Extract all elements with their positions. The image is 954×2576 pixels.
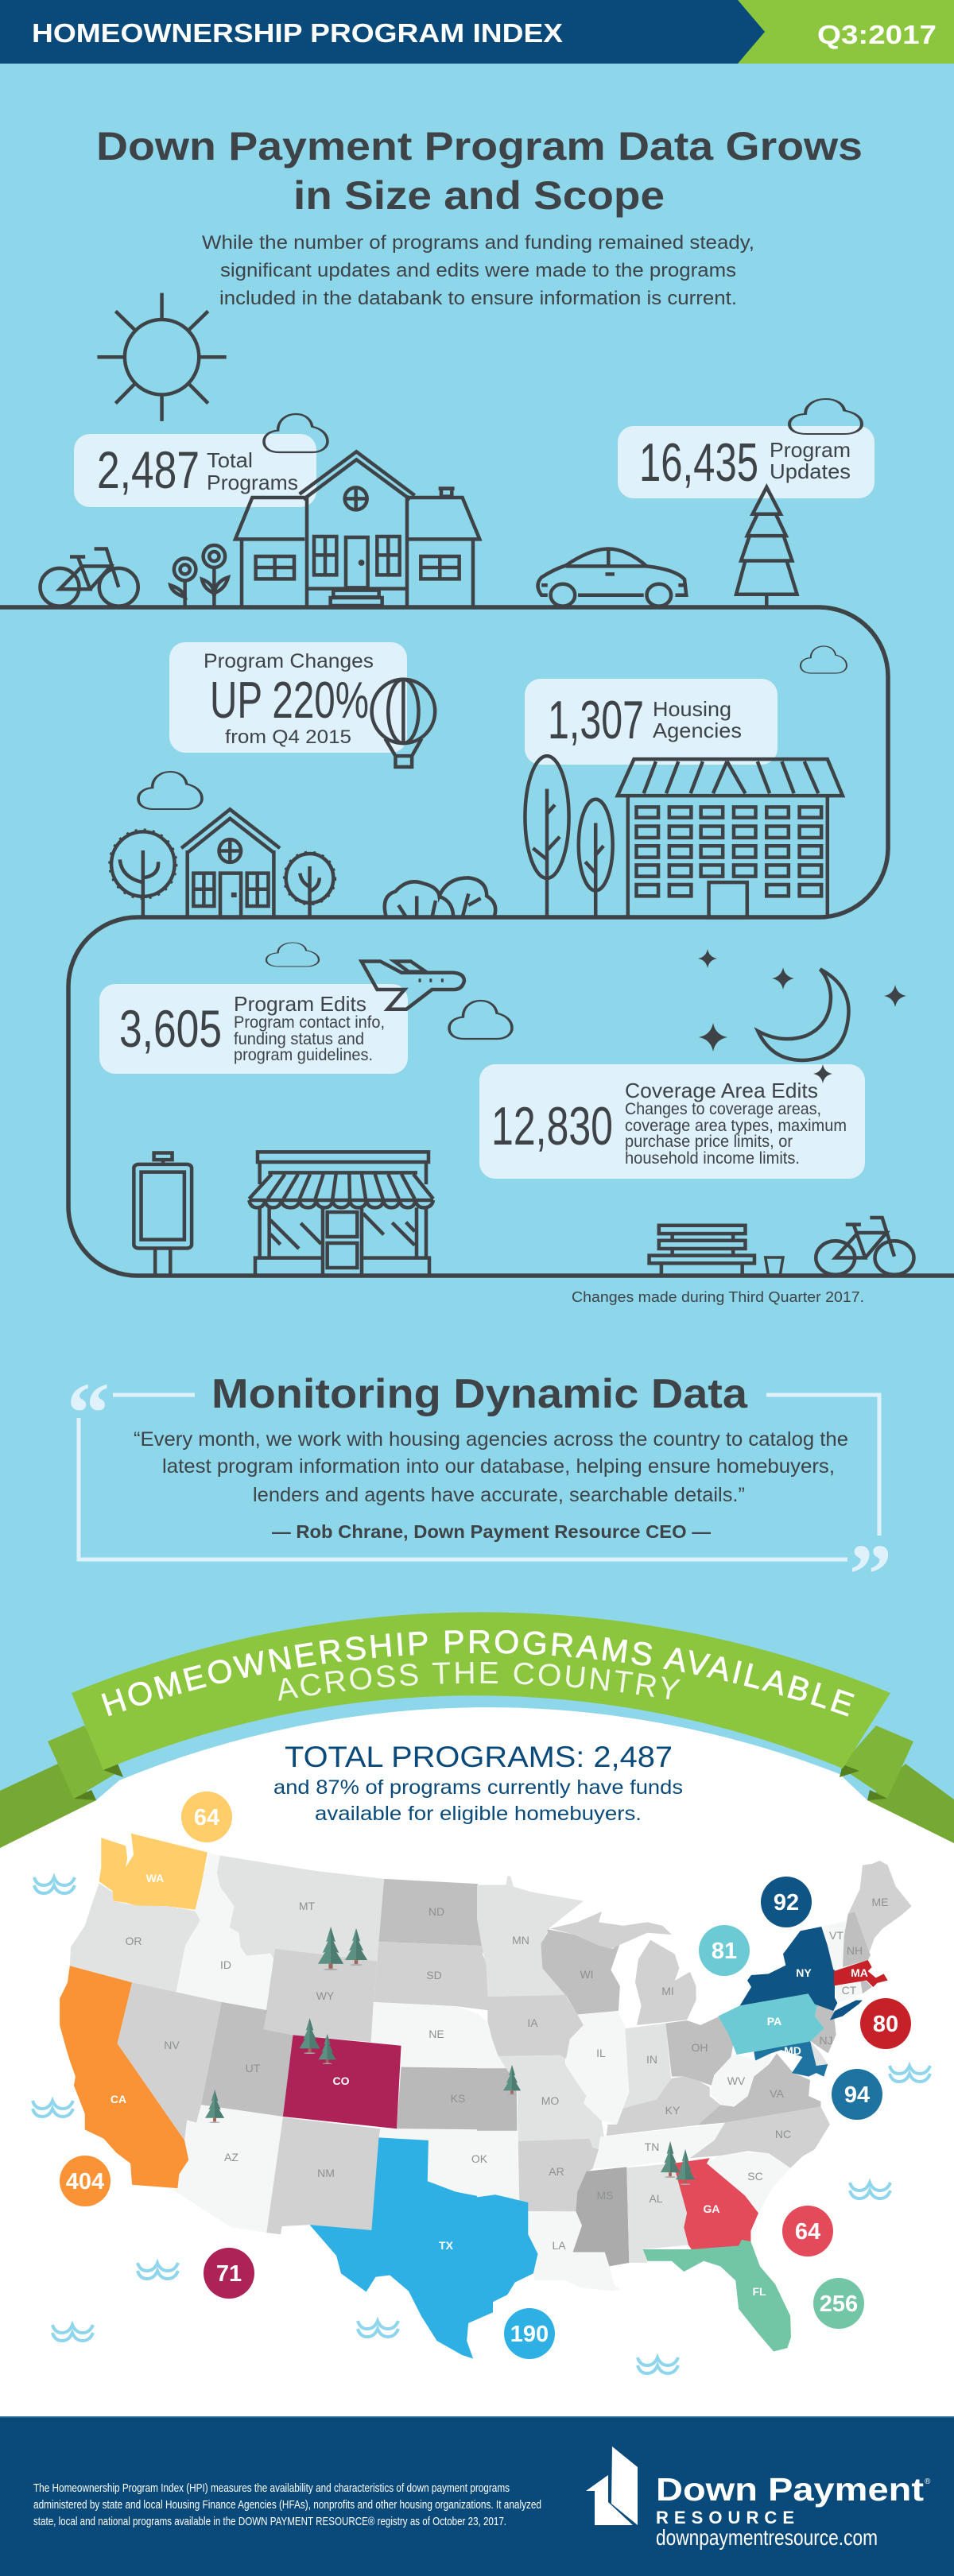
map labels: highlighted states: NY bbox=[796, 1966, 812, 1979]
map labels: grey states: AR bbox=[549, 2165, 564, 2178]
icon: bicycle bbox=[41, 549, 138, 606]
state count bubbles bbox=[60, 1792, 911, 2359]
map: northeastern states bbox=[718, 1861, 912, 2055]
icon: cloud bbox=[449, 1001, 512, 1039]
stat: housing agencies: 1,307 bbox=[548, 690, 644, 750]
map labels: grey states: OR bbox=[126, 1935, 142, 1947]
map labels: grey states: LA bbox=[552, 2239, 566, 2252]
title bbox=[96, 124, 863, 218]
map labels: grey states: OH bbox=[692, 2041, 708, 2054]
map labels: grey states: AL bbox=[649, 2192, 663, 2205]
closing quote mark: ” bbox=[849, 1528, 892, 1622]
map labels: grey states: OK bbox=[471, 2152, 488, 2165]
stat: coverage area edits: Changes to coverage areas, bbox=[625, 1100, 821, 1118]
map labels: grey states: KY bbox=[665, 2104, 681, 2117]
ribbon subheading: ACROSS THE COUNTRY bbox=[278, 1662, 681, 1701]
bubble: WA 64: 64 bbox=[194, 1805, 219, 1830]
map labels: grey states: WY bbox=[316, 1989, 335, 2002]
map labels: grey states: MO bbox=[541, 2094, 559, 2107]
icon: street sign bbox=[134, 1153, 192, 1276]
quote text bbox=[134, 1428, 848, 1506]
icon: house bbox=[235, 451, 479, 606]
stat: housing agencies: Agencies bbox=[653, 719, 742, 742]
map labels: highlighted states bbox=[111, 1872, 868, 2298]
footer disclaimer: administered by state and local Housing Finance Agencies (HFAs), nonprofits and other housing organizations. It analyzed bbox=[33, 2498, 541, 2512]
quote heading: Monitoring Dynamic Data bbox=[211, 1371, 748, 1417]
icon: storefront bbox=[249, 1152, 433, 1274]
map labels: grey states: IN bbox=[646, 2053, 657, 2066]
intro text: significant updates and edits were made to the programs bbox=[220, 260, 736, 281]
icon: airplane bbox=[362, 961, 464, 1009]
icon: cloud bbox=[264, 414, 328, 452]
stat: program edits: Program Edits bbox=[234, 992, 366, 1016]
map labels: highlighted states: CA bbox=[111, 2093, 126, 2105]
map labels: grey states: KS bbox=[451, 2092, 465, 2105]
quote panel bbox=[67, 1366, 892, 1622]
stat: total programs: Total bbox=[207, 448, 253, 472]
map labels: grey states bbox=[126, 1896, 889, 2252]
title: Down Payment Program Data Grows bbox=[96, 124, 863, 169]
icon: pine tree bbox=[736, 487, 797, 607]
icon: moon and stars bbox=[698, 949, 906, 1083]
total programs summary: and 87% of programs currently have funds bbox=[273, 1776, 683, 1799]
map labels: grey states: VA bbox=[770, 2087, 784, 2100]
icon: cloud bbox=[789, 399, 862, 434]
stat: program edits: Program contact info, bbox=[234, 1013, 385, 1032]
logo: Down Payment Resource: Down Payment bbox=[656, 2471, 924, 2508]
icon: cloud bbox=[801, 646, 847, 673]
map labels: highlighted states: PA bbox=[767, 2015, 781, 2028]
bubble: TX 190: 190 bbox=[510, 2322, 549, 2347]
map: western states bbox=[60, 1834, 493, 2358]
map labels: grey states: SD bbox=[426, 1969, 442, 1981]
stat: total programs: Programs bbox=[207, 471, 298, 494]
stat: program changes: Program Changes bbox=[204, 650, 374, 672]
stat: housing agencies bbox=[525, 679, 778, 765]
map labels: grey states: NV bbox=[164, 2039, 180, 2051]
icon: cloud bbox=[138, 772, 202, 809]
bubble: TX 190 bbox=[504, 2308, 555, 2359]
intro text bbox=[202, 232, 754, 309]
bubble: FL 256: 256 bbox=[820, 2291, 858, 2317]
map labels: grey states: ND bbox=[429, 1905, 444, 1918]
bubble: WA 64 bbox=[181, 1792, 232, 1842]
map labels: grey states: MT bbox=[299, 1900, 316, 1912]
map labels: grey states: NJ bbox=[819, 2034, 833, 2047]
footer bbox=[0, 2416, 954, 2576]
map labels: highlighted states: FL bbox=[752, 2285, 766, 2298]
stat: program updates: 16,435 bbox=[639, 432, 758, 493]
footnote: changes made: Changes made during Third Quarter 2017. bbox=[572, 1289, 864, 1305]
map labels: grey states: SC bbox=[747, 2170, 763, 2183]
stat: coverage area edits: purchase price limits, or bbox=[625, 1133, 793, 1151]
quote text: “Every month, we work with housing agencies across the country to catalog the bbox=[134, 1428, 848, 1451]
logo: Down Payment Resource: ® bbox=[925, 2477, 931, 2486]
total programs summary: TOTAL PROGRAMS: 2,487 bbox=[285, 1741, 673, 1773]
intro text: included in the databank to ensure information is current. bbox=[219, 288, 737, 309]
quote text: lenders and agents have accurate, searchable details.” bbox=[253, 1484, 745, 1506]
map labels: grey states: MS bbox=[596, 2189, 614, 2202]
bubble: CA 404: 404 bbox=[66, 2169, 104, 2194]
icon: cloud bbox=[266, 943, 319, 966]
icon: tall trees bbox=[525, 756, 613, 917]
logo: Down Payment Resource: downpaymentresource.com bbox=[656, 2525, 878, 2550]
bubble: CA 404 bbox=[60, 2156, 111, 2206]
stat: program changes bbox=[169, 642, 407, 753]
stat: program edits: 3,605 bbox=[119, 999, 222, 1058]
icon: bushes bbox=[385, 877, 495, 917]
stat: program updates: Program bbox=[770, 438, 851, 462]
bubble: MA 80 bbox=[860, 1998, 911, 2049]
stat: housing agencies: Housing bbox=[653, 697, 731, 721]
bubble: CO 71: 71 bbox=[216, 2261, 242, 2287]
bubble: MD 94: 94 bbox=[844, 2082, 870, 2108]
total programs summary bbox=[273, 1741, 683, 1825]
map labels: grey states: TN bbox=[645, 2140, 659, 2153]
stat: program changes: from Q4 2015 bbox=[225, 726, 351, 748]
map labels: grey states: AZ bbox=[224, 2151, 238, 2163]
map labels: grey states: UT bbox=[246, 2062, 261, 2074]
stat: program updates bbox=[618, 426, 874, 498]
map labels: highlighted states: GA bbox=[703, 2202, 720, 2215]
bubble: FL 256 bbox=[813, 2278, 864, 2329]
stat: coverage area edits: Coverage Area Edits bbox=[625, 1079, 818, 1102]
winding road line bbox=[0, 607, 954, 1276]
title: in Size and Scope bbox=[293, 173, 665, 218]
logo: Down Payment Resource bbox=[586, 2446, 931, 2550]
total programs summary: available for eligible homebuyers. bbox=[315, 1803, 642, 1825]
icon: sun bbox=[97, 293, 227, 421]
footer disclaimer: The Homeownership Program Index (HPI) measures the availability and characteristics of down payment programs bbox=[33, 2481, 510, 2495]
icon: car bbox=[538, 549, 686, 606]
bubble: PA 81 bbox=[699, 1925, 750, 1976]
bubble: PA 81: 81 bbox=[712, 1939, 737, 1964]
quote frame bbox=[79, 1395, 879, 1559]
stat: coverage area edits bbox=[479, 1064, 865, 1179]
header banner: HOMEOWNERSHIP PROGRAM INDEX bbox=[32, 18, 563, 48]
map labels: highlighted states: MA bbox=[851, 1966, 868, 1979]
stat: coverage area edits: 12,830 bbox=[491, 1096, 613, 1156]
map labels: grey states: ME bbox=[871, 1896, 889, 1908]
map labels: highlighted states: WA bbox=[146, 1872, 164, 1885]
stat: total programs: 2,487 bbox=[97, 440, 200, 499]
icon: park bench bbox=[650, 1226, 754, 1276]
map labels: grey states: NH bbox=[847, 1944, 863, 1957]
header banner: Q3:2017 bbox=[817, 20, 937, 49]
footer disclaimer bbox=[33, 2481, 541, 2528]
icon: small house with trees bbox=[111, 809, 335, 917]
icon: hot air balloon bbox=[372, 680, 435, 767]
map: eastern states bbox=[477, 1876, 830, 2352]
map labels: grey states: NM bbox=[317, 2167, 335, 2179]
bubble: MA 80: 80 bbox=[873, 2012, 898, 2037]
map labels: grey states: MI bbox=[661, 1985, 674, 1997]
quote text: latest program information into our database, helping ensure homebuyers, bbox=[162, 1455, 835, 1478]
stat: coverage area edits: coverage area types, maximum bbox=[625, 1117, 847, 1135]
stat: program edits: funding status and bbox=[234, 1030, 364, 1048]
intro text: While the number of programs and funding remained steady, bbox=[202, 232, 754, 254]
footer disclaimer: state, local and national programs available in the DOWN PAYMENT RESOURCE® registry as of October 23, 2017. bbox=[33, 2515, 506, 2528]
icon: trash cup bbox=[766, 1257, 783, 1276]
map labels: grey states: WI bbox=[580, 1968, 594, 1981]
stat: coverage area edits: household income limits. bbox=[625, 1149, 800, 1168]
stat: total programs bbox=[74, 434, 316, 507]
map labels: grey states: VT bbox=[829, 1929, 843, 1942]
bubble: GA 64: 64 bbox=[795, 2219, 820, 2245]
bubble: CO 71 bbox=[204, 2248, 254, 2299]
map labels: grey states: NE bbox=[429, 2028, 444, 2040]
opening quote mark: “ bbox=[67, 1366, 110, 1461]
map waves bbox=[33, 1877, 930, 2373]
icon: apartment building bbox=[618, 759, 843, 917]
ribbon heading: HOMEOWNERSHIP PROGRAMS AVAILABLE bbox=[102, 1630, 855, 1717]
map labels: grey states: IA bbox=[527, 2016, 538, 2029]
stat: program changes: UP 220% bbox=[210, 671, 369, 729]
icon: flowers bbox=[170, 545, 228, 606]
map labels: grey states: ID bbox=[220, 1958, 231, 1971]
header banner bbox=[0, 0, 954, 64]
logo: Down Payment Resource: RESOURCE bbox=[656, 2508, 794, 2528]
ribbon banner bbox=[0, 1612, 954, 1848]
map labels: highlighted states: TX bbox=[439, 2239, 454, 2252]
bubble: GA 64 bbox=[782, 2206, 833, 2256]
map labels: grey states: CT bbox=[842, 1984, 857, 1997]
bubble: NY 92 bbox=[761, 1877, 812, 1927]
white map panel bbox=[0, 1707, 954, 2416]
bubble: MD 94 bbox=[832, 2069, 882, 2120]
map labels: grey states: NC bbox=[775, 2128, 791, 2140]
map labels: highlighted states: CO bbox=[332, 2074, 350, 2087]
quote attribution: — Rob Chrane, Down Payment Resource CEO — bbox=[272, 1521, 711, 1542]
map labels: grey states: MN bbox=[512, 1934, 529, 1947]
stat: program edits bbox=[99, 984, 408, 1074]
icon: bicycle bbox=[816, 1218, 913, 1275]
map labels: grey states: IL bbox=[596, 2047, 606, 2059]
stat: program edits: program guidelines. bbox=[234, 1046, 373, 1064]
map labels: highlighted states: MD bbox=[784, 2044, 801, 2057]
map pine trees bbox=[205, 1927, 695, 2185]
stat: program updates: Updates bbox=[770, 459, 851, 483]
bubble: NY 92: 92 bbox=[774, 1890, 799, 1916]
map labels: grey states: WV bbox=[727, 2074, 746, 2087]
